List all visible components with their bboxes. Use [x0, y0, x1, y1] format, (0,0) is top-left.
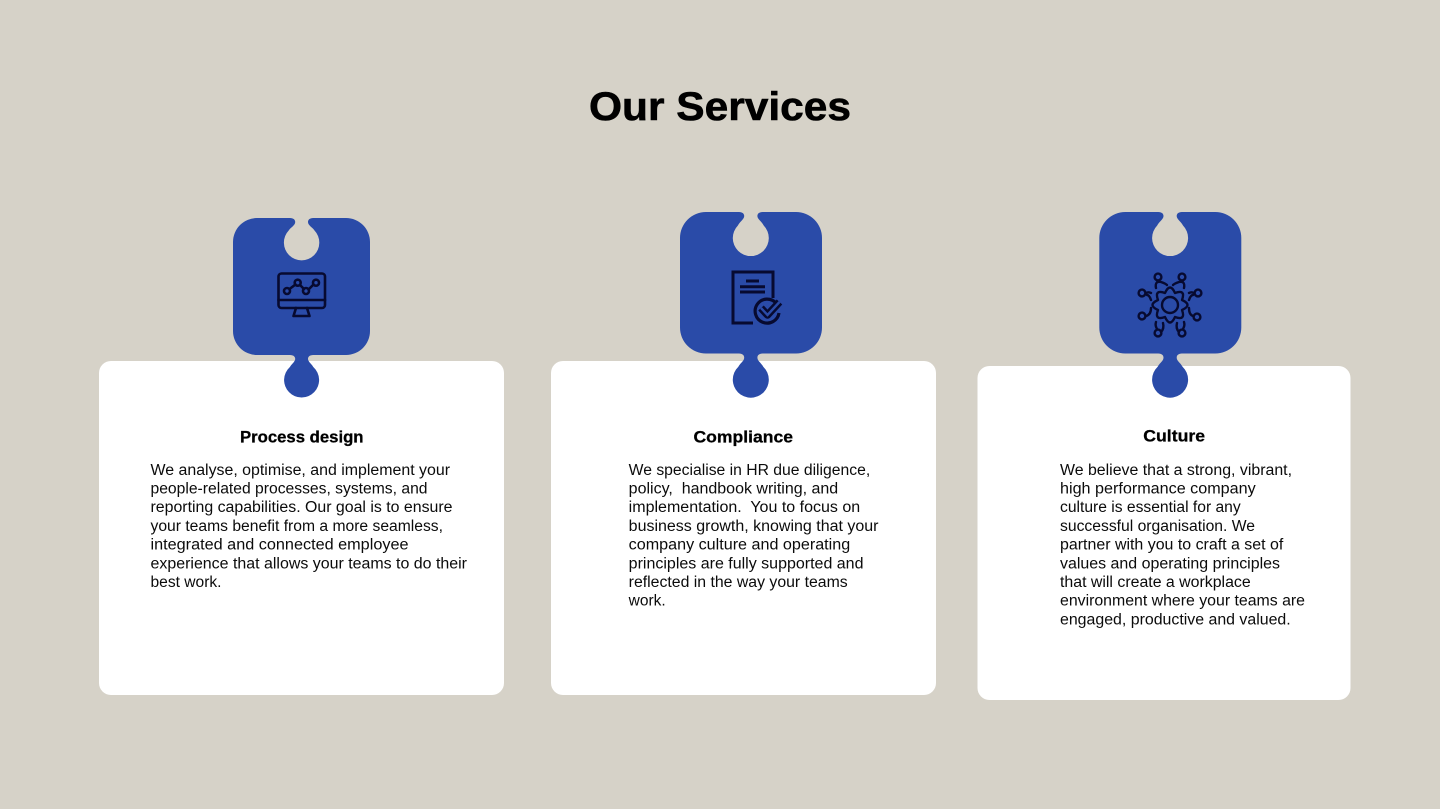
icon: monitor with line chart — [278, 274, 325, 316]
body text: high performance company — [1060, 480, 1256, 498]
heading: Compliance — [694, 428, 793, 446]
body text: We analyse, optimise, and implement your — [150, 462, 450, 479]
puzzle piece: compliance — [680, 212, 822, 398]
card background — [978, 366, 1350, 700]
body text: company culture and operating — [629, 537, 850, 554]
body text: We believe that a strong, vibrant, — [1060, 462, 1292, 479]
body text: reporting capabilities. Our goal is to ensure — [150, 499, 452, 516]
body text: best work. — [150, 574, 222, 591]
body text: values and operating principles — [1060, 555, 1280, 572]
body text: environment where your teams are — [1060, 593, 1305, 610]
body text: policy, handbook writing, and — [629, 480, 838, 498]
panel: compliance — [551, 361, 936, 695]
icon: document with check badge — [733, 272, 780, 323]
body text: business growth, knowing that your — [629, 518, 878, 535]
body text: reflected in the way your teams — [629, 574, 848, 591]
heading: Culture — [1143, 427, 1205, 446]
panel: culture — [978, 366, 1350, 700]
body text — [1060, 462, 1305, 628]
body text — [150, 462, 467, 591]
body text: culture is essential for any — [1060, 499, 1241, 516]
body text: experience that allows your teams to do their — [150, 555, 467, 572]
icon: gear surrounded by people — [1139, 274, 1201, 336]
panel: process design — [99, 361, 504, 695]
body text: principles are fully supported and — [629, 555, 864, 572]
body text: successful organisation. We — [1060, 518, 1255, 535]
body text — [628, 462, 878, 610]
body text: We specialise in HR due diligence, — [629, 462, 870, 479]
body text: implementation. You to focus on — [629, 499, 860, 516]
body text: partner with you to craft a set of — [1060, 537, 1284, 554]
body text: your teams benefit from a more seamless, — [150, 518, 443, 535]
body text: people-related processes, systems, and — [150, 480, 428, 498]
title: Our Services — [589, 85, 851, 129]
body text: integrated and connected employee — [150, 537, 408, 554]
puzzle piece: culture — [1099, 212, 1241, 398]
body text: work. — [628, 593, 666, 610]
card background — [99, 361, 504, 695]
body text: that will create a workplace — [1060, 574, 1251, 591]
card background — [551, 361, 936, 695]
heading: Process design — [240, 428, 364, 446]
puzzle piece: process design — [233, 218, 370, 398]
body text: engaged, productive and valued. — [1060, 611, 1291, 628]
